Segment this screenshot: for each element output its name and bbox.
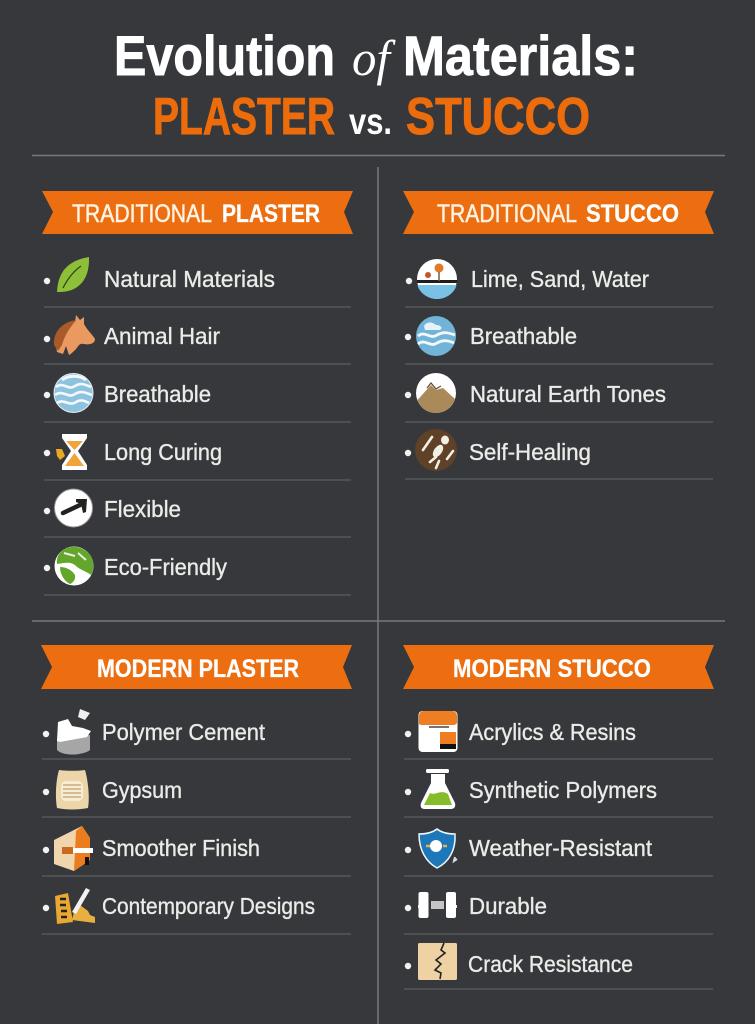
item: eco-friendly: Eco-Friendly	[104, 554, 227, 580]
panel: traditional plaster	[42, 191, 353, 595]
ribbon: traditional stucco	[403, 191, 714, 234]
item: animal hair: Animal Hair	[104, 323, 220, 349]
item: animal hair	[44, 315, 220, 355]
item: lime, sand, water: Lime, Sand, Water	[471, 266, 649, 292]
item: acrylics and resins: Acrylics & Resins	[469, 719, 636, 745]
item: smoother finish	[43, 826, 260, 871]
panel: modern stucco	[403, 645, 714, 989]
title: STUCCO	[406, 88, 590, 146]
item: breathable	[405, 316, 577, 356]
title: vs.	[349, 101, 392, 142]
item: lime, sand, water	[406, 259, 649, 299]
ribbon: traditional stucco: STUCCO	[586, 200, 679, 228]
item: breathable	[44, 374, 211, 412]
item: crack resistance: Crack Resistance	[468, 951, 633, 977]
panel: modern plaster	[41, 645, 352, 934]
panel: traditional stucco	[403, 191, 714, 479]
item: durable	[405, 892, 547, 919]
ribbon: traditional plaster: PLASTER	[222, 200, 320, 228]
item: synthetic polymers: Synthetic Polymers	[469, 777, 657, 803]
item: natural materials	[44, 257, 275, 292]
item: self-healing	[405, 429, 591, 471]
item: crack resistance	[405, 943, 633, 980]
item: contemporary designs	[43, 888, 315, 924]
item: synthetic polymers	[405, 769, 657, 809]
ribbon: traditional plaster	[42, 191, 353, 234]
ribbon: modern stucco	[403, 645, 714, 689]
ribbon: traditional plaster: TRADITIONAL	[72, 200, 212, 228]
title: Materials:	[403, 24, 638, 87]
item: self-healing: Self-Healing	[469, 439, 591, 465]
item: natural earth tones	[405, 373, 666, 413]
item: polymer cement: Polymer Cement	[102, 719, 266, 745]
item: breathable: Breathable	[470, 323, 577, 349]
title: of	[352, 30, 396, 86]
item: long curing: Long Curing	[104, 439, 222, 465]
item: gypsum: Gypsum	[102, 777, 182, 803]
item: smoother finish: Smoother Finish	[102, 835, 260, 861]
ribbon: modern stucco: MODERN STUCCO	[453, 655, 651, 683]
ribbon: modern plaster	[41, 645, 352, 689]
title	[114, 24, 638, 146]
item: weather-resistant: Weather-Resistant	[469, 835, 653, 861]
item: natural earth tones: Natural Earth Tones	[470, 381, 666, 407]
ribbon: traditional stucco: TRADITIONAL	[437, 200, 577, 228]
ribbon: modern plaster: MODERN PLASTER	[97, 655, 299, 683]
item: polymer cement	[43, 709, 266, 755]
item: durable: Durable	[469, 893, 547, 919]
item: flexible: Flexible	[104, 496, 181, 522]
item: flexible	[44, 489, 181, 527]
item: contemporary designs: Contemporary Designs	[102, 893, 315, 919]
item: natural materials: Natural Materials	[104, 266, 275, 292]
title: Evolution	[114, 24, 335, 87]
item: long curing	[44, 434, 222, 470]
title: PLASTER	[153, 88, 335, 146]
item: acrylics and resins	[405, 711, 636, 752]
item: gypsum	[43, 770, 182, 810]
item: breathable: Breathable	[104, 381, 211, 407]
item: weather-resistant	[405, 829, 653, 868]
item: eco-friendly	[44, 546, 227, 586]
